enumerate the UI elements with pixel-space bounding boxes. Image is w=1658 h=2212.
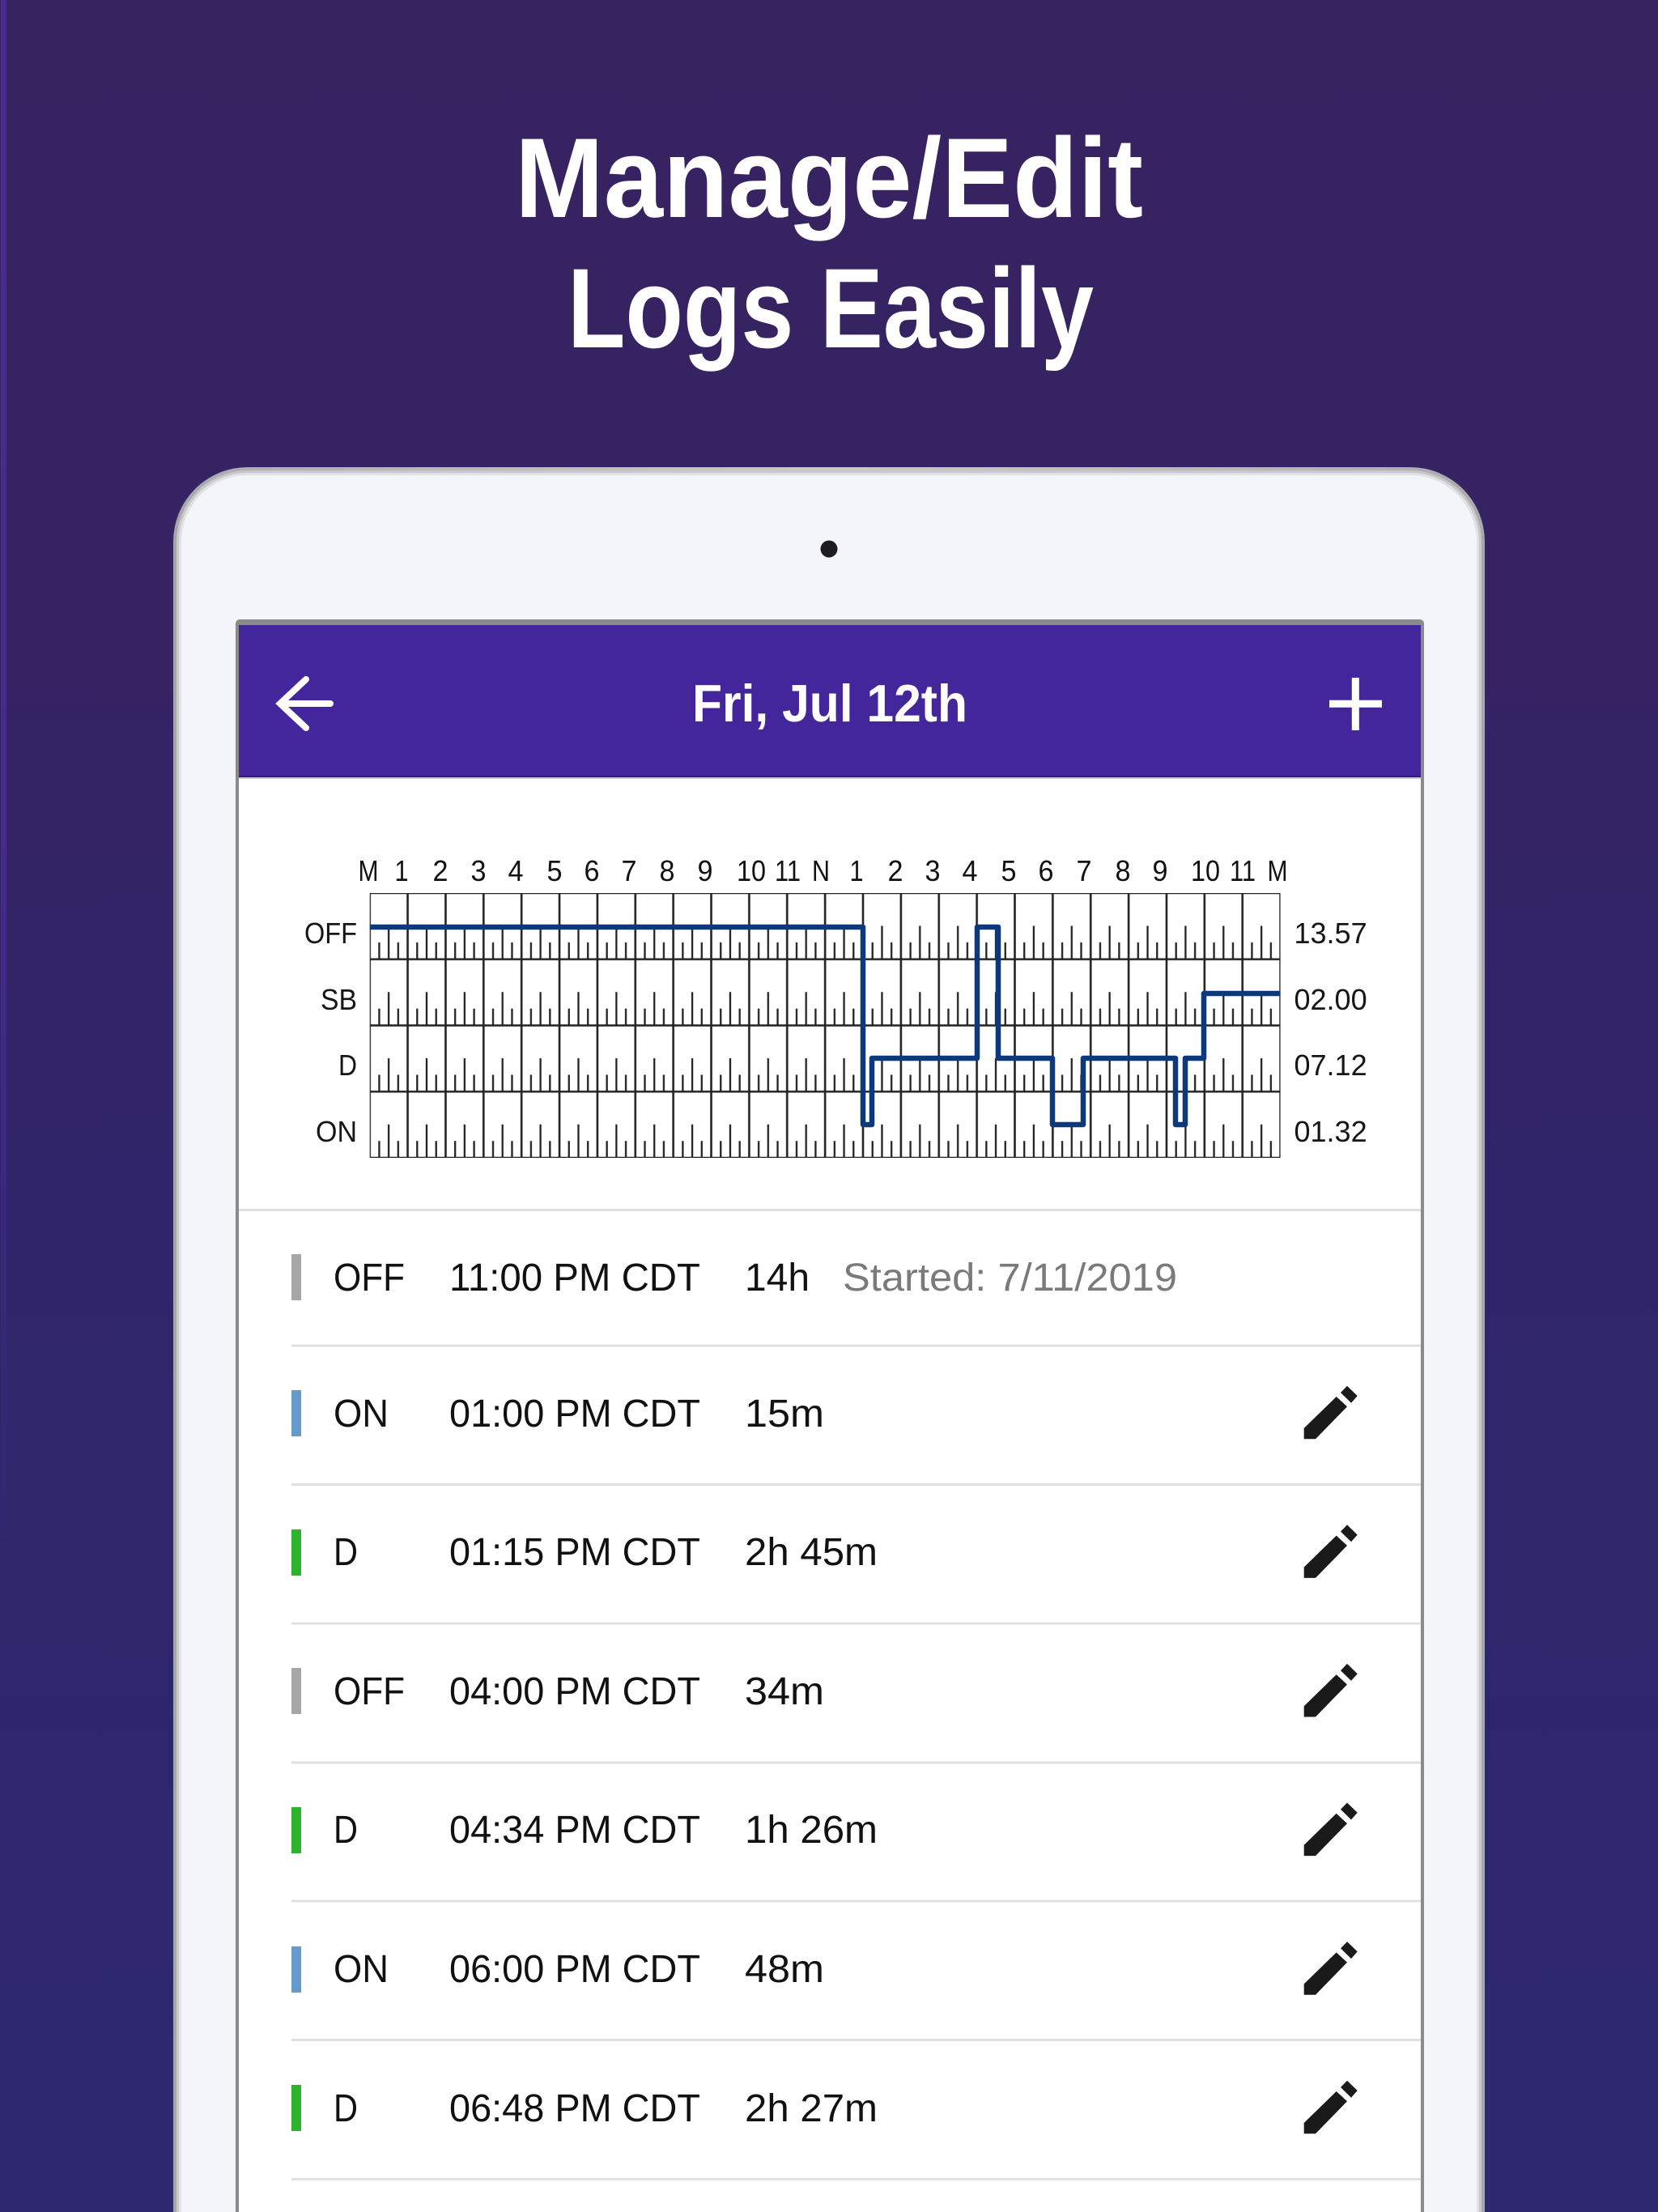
icon: pencil — [1304, 1942, 1358, 1995]
hour labels: 2 — [887, 854, 903, 887]
hour labels: 3 — [471, 854, 486, 887]
status labels: SB — [321, 983, 357, 1016]
hour labels: 8 — [1116, 854, 1130, 887]
status totals — [1294, 917, 1367, 1148]
log row: D 01:15 PM — [291, 1525, 1358, 1578]
log chart — [304, 854, 1367, 1158]
icon: plus — [1329, 678, 1382, 730]
log row: ON 06:00 PM: 06:00 PM CDT — [449, 1948, 700, 1991]
log row: ON 06:00 PM: 48m — [745, 1948, 824, 1991]
log row: D 06:48 PM: 06:48 PM CDT — [449, 2087, 700, 2130]
log row: D 06:48 PM: D — [334, 2087, 358, 2130]
hour labels — [358, 854, 1287, 887]
log row: D 04:34 PM — [291, 1802, 1358, 1856]
hour labels: 4 — [962, 854, 978, 887]
hour labels: 2 — [432, 854, 449, 887]
hour labels: 9 — [698, 854, 712, 887]
log row: OFF 04:00 PM: 34m — [745, 1670, 824, 1713]
device edge — [173, 467, 1485, 2212]
title: Manage/Edit — [515, 114, 1143, 241]
log row: OFF 11:00 PM: 14h — [745, 1257, 810, 1300]
icon: back arrow — [280, 679, 330, 728]
camera — [821, 541, 837, 557]
hour labels: 9 — [1153, 854, 1167, 887]
hour labels: N — [812, 854, 830, 887]
log row: OFF 11:00 PM: OFF — [334, 1257, 405, 1300]
log row: D 01:15 PM: 01:15 PM CDT — [449, 1531, 700, 1574]
log row: ON 06:00 PM: ON — [334, 1948, 389, 1991]
left edge stripe — [1, 0, 6, 1538]
hour labels: 5 — [1001, 854, 1017, 887]
icon: pencil — [1304, 1802, 1358, 1856]
duty status line — [370, 927, 1280, 1125]
log row: OFF 11:00 PM: 11:00 PM CDT — [449, 1257, 700, 1300]
title — [515, 114, 1143, 372]
icon: pencil — [1304, 1664, 1358, 1716]
hour labels: 10 — [737, 854, 766, 887]
hour labels: 4 — [508, 854, 523, 887]
grid — [370, 893, 1281, 1158]
status labels: OFF — [304, 917, 357, 950]
tablet device — [173, 467, 1485, 2212]
chart bottom divider — [239, 1209, 1421, 1211]
status totals: 07.12 — [1294, 1049, 1367, 1082]
hour labels: 6 — [1038, 854, 1054, 887]
hour labels: 7 — [622, 854, 636, 887]
icon: pencil — [1304, 2081, 1358, 2133]
hour labels: 1 — [850, 854, 863, 887]
log row: ON 06:00 PM — [291, 1942, 1358, 1995]
hour labels: 10 — [1191, 854, 1220, 887]
log row: D 04:34 PM: 04:34 PM CDT — [449, 1809, 700, 1852]
log row: OFF 11:00 PM: Started: 7/11/2019 — [843, 1257, 1177, 1300]
hour labels: 8 — [659, 854, 675, 887]
log row: OFF 04:00 PM: OFF — [334, 1670, 405, 1713]
log row: D 04:34 PM: 1h 26m — [745, 1809, 878, 1852]
hour labels: 11 — [775, 854, 801, 887]
icon: pencil — [1304, 1525, 1358, 1578]
log row: D 04:34 PM: D — [334, 1809, 358, 1852]
log row: OFF 04:00 PM: 04:00 PM CDT — [449, 1670, 700, 1713]
hour labels: 5 — [547, 854, 562, 887]
hour labels: 3 — [925, 854, 941, 887]
log row: OFF 04:00 PM — [291, 1664, 1358, 1716]
app header bar — [239, 625, 1421, 779]
screen frame — [236, 619, 1424, 2212]
title: Logs Easily — [568, 245, 1094, 372]
status labels: ON — [316, 1115, 357, 1148]
hour labels: M — [358, 854, 379, 887]
log row: ON 01:00 PM — [291, 1386, 1358, 1439]
status totals: 02.00 — [1294, 983, 1367, 1016]
icon: pencil — [1304, 1386, 1358, 1439]
log row: ON 01:00 PM: ON — [334, 1393, 389, 1436]
hour labels: 6 — [585, 854, 599, 887]
screen — [239, 625, 1421, 2212]
device bezel — [181, 475, 1477, 2212]
log row: OFF 11:00 PM — [291, 1254, 1177, 1300]
hour labels: 7 — [1077, 854, 1091, 887]
log row: ON 01:00 PM: 01:00 PM CDT — [449, 1393, 700, 1436]
hour labels: M — [1268, 854, 1287, 887]
status labels — [304, 917, 357, 1148]
log row: D 06:48 PM — [291, 2081, 1358, 2133]
hour labels: 1 — [395, 854, 408, 887]
log row: D 06:48 PM: 2h 27m — [745, 2087, 878, 2130]
status totals: 01.32 — [1294, 1115, 1367, 1148]
log row: ON 01:00 PM: 15m — [745, 1393, 824, 1436]
hour labels: 11 — [1230, 854, 1256, 887]
header date: Fri, Jul 12th — [692, 674, 967, 733]
status labels: D — [338, 1049, 357, 1082]
status totals: 13.57 — [1294, 917, 1367, 950]
log row: D 01:15 PM: 2h 45m — [745, 1531, 878, 1574]
log row: D 01:15 PM: D — [334, 1531, 358, 1574]
